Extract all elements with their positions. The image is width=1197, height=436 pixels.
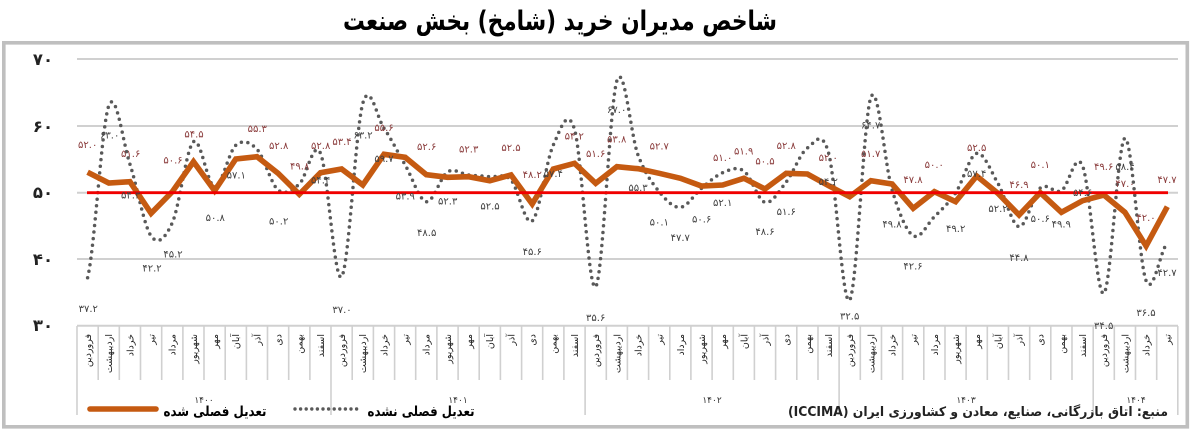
data labels: not seasonally adjusted: ۴۴.۸ <box>1009 253 1029 264</box>
data labels: not seasonally adjusted: ۵۷.۴ <box>544 169 563 180</box>
data labels: seasonally adjusted: ۵۲.۵ <box>501 143 521 154</box>
legend: seasonally adjusted: تعدیل فصلی شده <box>164 404 266 420</box>
x axis month labels: دی <box>274 334 284 346</box>
x axis month labels: مهر <box>210 334 221 350</box>
y axis labels: ۷۰ <box>33 50 53 69</box>
x axis month labels: خرداد <box>633 334 644 356</box>
x axis month labels: مهر <box>972 334 983 350</box>
x axis month labels: مرداد <box>422 334 433 355</box>
x axis year labels: ۱۴۰۰ <box>194 396 214 406</box>
data labels: seasonally adjusted: ۵۲.۶ <box>417 142 436 153</box>
data labels: seasonally adjusted: ۵۲.۸ <box>777 141 797 152</box>
y axis labels: ۳۰ <box>33 316 53 335</box>
x axis month labels: اسفند <box>1078 334 1089 357</box>
x axis month labels: اردیبهشت <box>866 334 877 373</box>
x axis month labels: مهر <box>464 334 475 350</box>
data labels: seasonally adjusted: ۴۷.۷ <box>1157 175 1177 186</box>
x axis month labels: اردیبهشت <box>358 334 369 373</box>
data labels: not seasonally adjusted: ۳۴.۵ <box>1094 321 1113 332</box>
data labels: not seasonally adjusted: ۵۱.۶ <box>777 207 796 218</box>
data labels: not seasonally adjusted: ۶۷.۰ <box>607 105 626 116</box>
x axis month labels: اردیبهشت <box>104 334 115 373</box>
data labels: seasonally adjusted: ۵۲.۸ <box>311 141 331 152</box>
x axis month labels: بهمن <box>295 334 306 354</box>
data labels: not seasonally adjusted: ۵۴.۲ <box>819 177 838 188</box>
data labels: not seasonally adjusted: ۵۰.۲ <box>269 216 288 228</box>
y axis labels: ۶۰ <box>33 117 53 136</box>
data labels: not seasonally adjusted: ۴۹.۲ <box>946 224 965 235</box>
data labels: seasonally adjusted: ۵۰.۵ <box>755 156 775 168</box>
x axis year separators <box>77 326 1178 415</box>
data labels: seasonally adjusted: ۴۲.۰ <box>1136 213 1156 224</box>
data labels: seasonally adjusted: ۵۱.۹ <box>734 146 753 158</box>
x axis month labels: دی <box>528 334 539 346</box>
x axis month labels <box>83 334 1174 373</box>
data labels: seasonally adjusted: ۵۵.۶ <box>374 123 394 134</box>
data labels: seasonally adjusted: ۴۹.۸ <box>290 162 310 172</box>
y axis labels: ۵۰ <box>33 183 53 202</box>
data labels: not seasonally adjusted: ۵۰.۶ <box>1031 214 1050 225</box>
data labels: not seasonally adjusted: ۶۴.۷ <box>861 120 881 132</box>
data labels: not seasonally adjusted: ۵۹.۷ <box>374 154 394 165</box>
data labels: not seasonally adjusted: ۶۳.۰ <box>100 130 119 142</box>
data labels: not seasonally adjusted: ۵۷.۱ <box>227 170 246 182</box>
data labels: seasonally adjusted: ۵۲.۳ <box>459 144 479 156</box>
x axis month labels: اسفند <box>824 334 835 357</box>
x axis month ticks <box>98 326 1157 380</box>
x axis month labels: بهمن <box>1057 334 1068 354</box>
data labels: seasonally adjusted: ۵۳.۴ <box>332 137 352 148</box>
x axis month labels: مرداد <box>930 334 941 355</box>
data labels: not seasonally adjusted: ۵۳.۹ <box>396 192 415 202</box>
data labels: not seasonally adjusted: ۵۷.۴ <box>967 169 986 180</box>
x axis month labels: آبان <box>229 334 242 349</box>
data labels: seasonally adjusted: ۴۷.۰ <box>1115 179 1135 190</box>
data labels: not seasonally adjusted: ۳۶.۵ <box>1136 308 1156 319</box>
data labels: not seasonally adjusted: ۴۲.۷ <box>1157 268 1177 279</box>
source note: منبع: اتاق بازرگانی، صنایع، معادن و کشاورزی ایران (ICCIMA) <box>788 404 1168 420</box>
data labels: seasonally adjusted: ۵۱.۶ <box>586 149 605 160</box>
x axis month labels: فروردین <box>1099 334 1110 367</box>
series: not seasonally adjusted (dotted) <box>88 77 1167 300</box>
data labels: seasonally adjusted: ۵۴.۲ <box>565 132 584 142</box>
data labels: not seasonally adjusted: ۴۲.۶ <box>903 262 923 272</box>
data labels: seasonally adjusted: ۵۱.۶ <box>121 149 140 160</box>
data labels: not seasonally adjusted: ۵۲.۲ <box>988 204 1008 215</box>
data labels: seasonally adjusted: ۵۰.۰ <box>925 160 944 171</box>
threshold line at 50 <box>87 191 1168 194</box>
data labels: seasonally adjusted: ۵۰.۱ <box>1031 160 1050 171</box>
data labels: seasonally adjusted: ۵۲.۰ <box>78 140 97 151</box>
x axis month labels: آذر <box>1012 334 1026 346</box>
data labels: not seasonally adjusted: ۴۷.۷ <box>671 233 691 244</box>
data labels: seasonally adjusted: ۵۳.۸ <box>607 134 627 146</box>
data labels: not seasonally adjusted: ۳۲.۵ <box>840 312 859 322</box>
x axis month labels: خرداد <box>888 334 898 356</box>
x axis month labels: تیر <box>909 334 920 346</box>
x axis year labels: ۱۴۰۳ <box>956 396 976 406</box>
x axis month labels: آذر <box>504 334 517 346</box>
x axis month labels: خرداد <box>1142 334 1152 356</box>
x axis month labels: شهریور <box>951 334 962 365</box>
y axis labels <box>33 50 53 335</box>
data labels: not seasonally adjusted: ۵۰.۶ <box>692 214 711 226</box>
data labels: seasonally adjusted <box>78 123 1177 224</box>
data labels: seasonally adjusted: ۴۹.۶ <box>1094 162 1113 173</box>
data labels: not seasonally adjusted: ۳۷.۲ <box>79 304 98 315</box>
x axis month labels: مهر <box>718 334 729 350</box>
data labels: not seasonally adjusted: ۳۵.۶ <box>586 313 605 324</box>
x axis month labels: فروردین <box>337 334 348 367</box>
series: seasonally adjusted (brown) <box>88 154 1167 246</box>
data labels: seasonally adjusted: ۵۱.۷ <box>861 149 881 160</box>
data labels: not seasonally adjusted: ۵۰.۸ <box>206 213 226 224</box>
data labels: seasonally adjusted: ۵۱.۰ <box>713 153 732 164</box>
x axis month labels: آبان <box>991 334 1004 349</box>
x axis year labels <box>194 396 1146 406</box>
legend: not seasonally adjusted: تعدیل فصلی نشده <box>368 404 474 420</box>
x axis month labels: فروردین <box>83 334 94 367</box>
data labels: seasonally adjusted: ۵۲.۰ <box>819 153 838 164</box>
y axis labels: ۴۰ <box>33 250 53 269</box>
x axis month labels: اسفند <box>570 334 581 357</box>
data labels: not seasonally adjusted: ۴۵.۲ <box>163 250 183 260</box>
x axis month labels: تیر <box>1163 334 1174 346</box>
data labels: not seasonally adjusted: ۵۲.۳ <box>438 196 458 208</box>
x axis month labels: تیر <box>146 334 158 346</box>
x axis year labels: ۱۴۰۲ <box>702 396 722 406</box>
data labels: seasonally adjusted: ۵۲.۷ <box>650 142 670 152</box>
data labels: not seasonally adjusted: ۵۴.۳ <box>121 190 141 202</box>
x axis month labels: مرداد <box>168 334 179 355</box>
grid lines <box>77 59 1178 326</box>
data labels: seasonally adjusted: ۴۸.۲ <box>523 170 542 181</box>
data labels: not seasonally adjusted: ۵۴.۴ <box>311 176 330 186</box>
data labels: not seasonally adjusted: ۵۲.۵ <box>480 202 500 212</box>
x axis month labels: مرداد <box>676 334 687 355</box>
data labels: not seasonally adjusted: ۴۲.۲ <box>142 264 162 274</box>
x axis month labels: بهمن <box>803 334 814 354</box>
x axis month labels: خرداد <box>379 334 390 356</box>
x axis month labels: آبان <box>737 334 750 349</box>
x axis month labels: فروردین <box>845 334 856 367</box>
data labels: not seasonally adjusted: ۵۵.۳ <box>628 183 648 194</box>
data labels: not seasonally adjusted: ۵۲.۱ <box>713 198 732 209</box>
data labels: seasonally adjusted: ۵۲.۸ <box>269 141 289 152</box>
data labels: not seasonally adjusted: ۴۵.۶ <box>523 247 542 258</box>
x axis month labels: شهریور <box>443 334 454 365</box>
data labels: seasonally adjusted: ۵۵.۳ <box>248 124 268 135</box>
data labels: not seasonally adjusted: ۴۸.۵ <box>417 228 436 239</box>
x axis month labels: دی <box>782 334 793 346</box>
data labels: seasonally adjusted: ۵۴.۵ <box>184 130 204 140</box>
data labels: not seasonally adjusted <box>79 105 1177 332</box>
data labels: not seasonally adjusted: ۵۰.۱ <box>650 218 669 228</box>
data labels: not seasonally adjusted: ۵۸.۴ <box>1115 162 1135 173</box>
data labels: seasonally adjusted: ۴۷.۸ <box>903 175 923 186</box>
x axis year labels: ۱۴۰۴ <box>1126 396 1146 406</box>
data labels: not seasonally adjusted: ۵۴.۶ <box>1073 188 1092 199</box>
x axis month labels: اسفند <box>316 334 327 357</box>
x axis month labels: آذر <box>758 334 771 346</box>
x axis year labels: ۱۴۰۱ <box>448 396 468 406</box>
x axis month labels: دی <box>1036 334 1047 346</box>
x axis month labels: خرداد <box>125 334 136 356</box>
x axis month labels: شهریور <box>189 334 200 365</box>
x axis month labels: آذر <box>250 334 263 346</box>
x axis month labels: تیر <box>401 334 412 346</box>
x axis month labels: فروردین <box>591 334 602 367</box>
x axis month labels: اردیبهشت <box>1120 334 1131 373</box>
data labels: not seasonally adjusted: ۴۹.۸ <box>882 220 902 230</box>
data labels: not seasonally adjusted: ۶۳.۲ <box>353 130 373 142</box>
x axis month labels: اردیبهشت <box>612 334 623 373</box>
data labels: not seasonally adjusted: ۴۹.۹ <box>1052 220 1071 230</box>
x axis month labels: شهریور <box>697 334 708 365</box>
data labels: seasonally adjusted: ۵۲.۵ <box>967 143 986 154</box>
x axis month labels: بهمن <box>549 334 560 354</box>
data labels: not seasonally adjusted: ۳۷.۰ <box>332 305 352 316</box>
data labels: seasonally adjusted: ۴۶.۹ <box>1009 180 1029 191</box>
data labels: seasonally adjusted: ۵۰.۶ <box>163 156 183 166</box>
x axis month labels: آبان <box>483 334 496 349</box>
x axis month labels: تیر <box>655 334 666 346</box>
title: شاخص مدیران خرید (شامخ) بخش صنعت <box>343 6 777 37</box>
data labels: not seasonally adjusted: ۴۸.۶ <box>755 227 775 238</box>
